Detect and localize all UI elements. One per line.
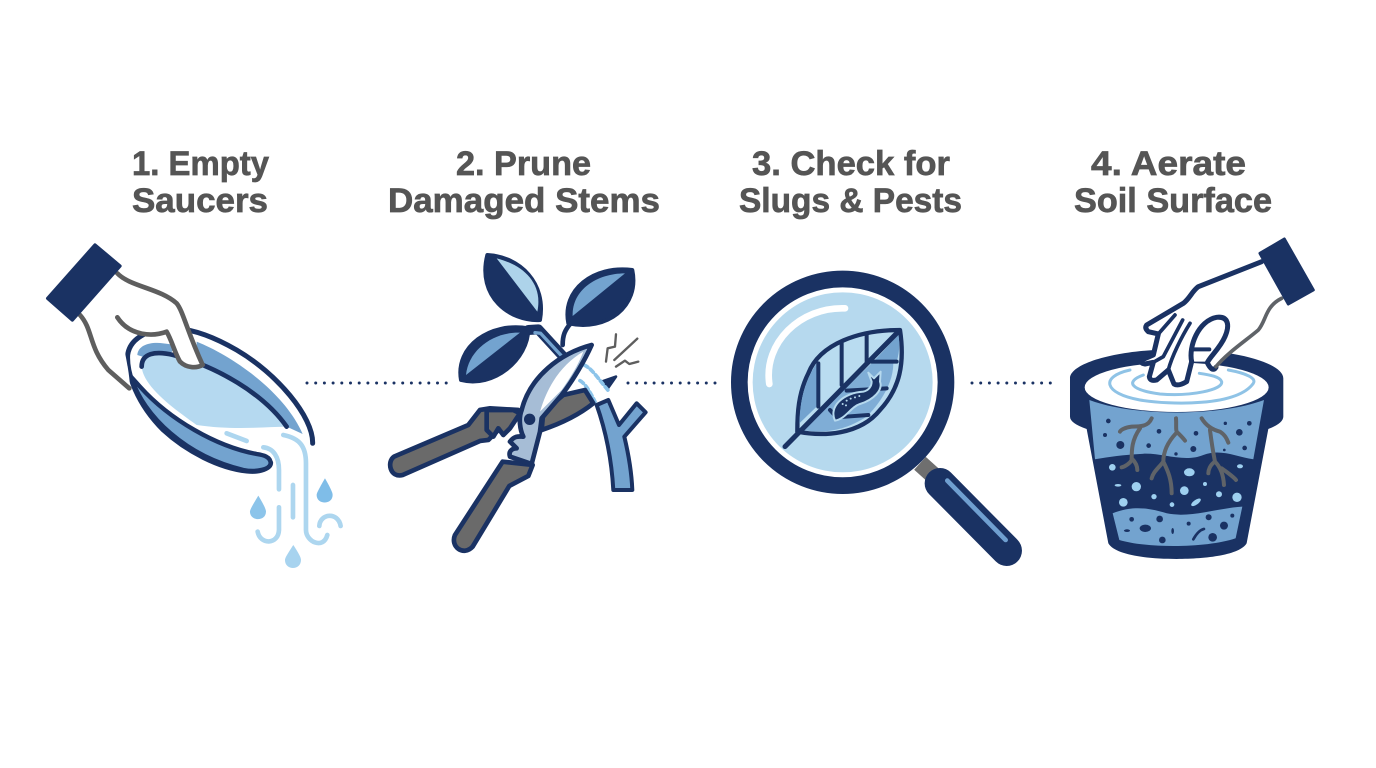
heading: step 1: 1. Empty	[132, 145, 269, 183]
heading: step 3: Slugs & Pests	[739, 182, 962, 220]
heading: step 1	[132, 145, 269, 220]
pot body	[1070, 349, 1283, 559]
cuff	[48, 245, 120, 320]
dotted connector 1	[307, 382, 447, 384]
spark marks	[606, 334, 638, 367]
icon: magnifying glass over leaf with slug	[739, 279, 1007, 551]
heading: step 4: 4. Aerate	[1091, 145, 1246, 183]
water stream and drops	[227, 433, 341, 568]
roots	[1120, 418, 1236, 493]
icon: hand tipping saucer	[48, 245, 341, 568]
severed stem tip and dashed cut	[580, 365, 616, 403]
soil layers	[1089, 400, 1264, 546]
dotted connector 2	[628, 382, 717, 384]
leaf	[785, 330, 902, 447]
heading: step 2: Damaged Stems	[388, 182, 660, 220]
soil surface	[1085, 363, 1269, 412]
heading: step 4	[1074, 145, 1272, 220]
heading: step 1: Saucers	[132, 182, 268, 220]
dotted connector 3	[972, 382, 1052, 384]
shears	[390, 345, 593, 551]
heading: step 2	[388, 145, 660, 220]
icon: hand aerating soil in pot	[1070, 239, 1313, 559]
pivot	[524, 414, 535, 425]
cuff	[1260, 239, 1313, 304]
saucer	[128, 328, 313, 471]
ripples	[1110, 370, 1254, 403]
icon: pruning shears cutting stem	[390, 255, 646, 551]
hand	[1141, 262, 1282, 385]
heading: step 3: 3. Check for	[752, 145, 950, 183]
heading: step 3	[739, 145, 962, 220]
lens	[739, 279, 946, 486]
handle	[920, 463, 1007, 551]
heading: step 4: Soil Surface	[1074, 182, 1272, 220]
leaves and upper stem	[460, 255, 633, 381]
lower branch	[597, 400, 646, 490]
soil pebbles	[1103, 419, 1252, 543]
hand	[80, 273, 203, 388]
slug	[833, 372, 881, 421]
heading: step 2: 2. Prune	[456, 145, 591, 183]
